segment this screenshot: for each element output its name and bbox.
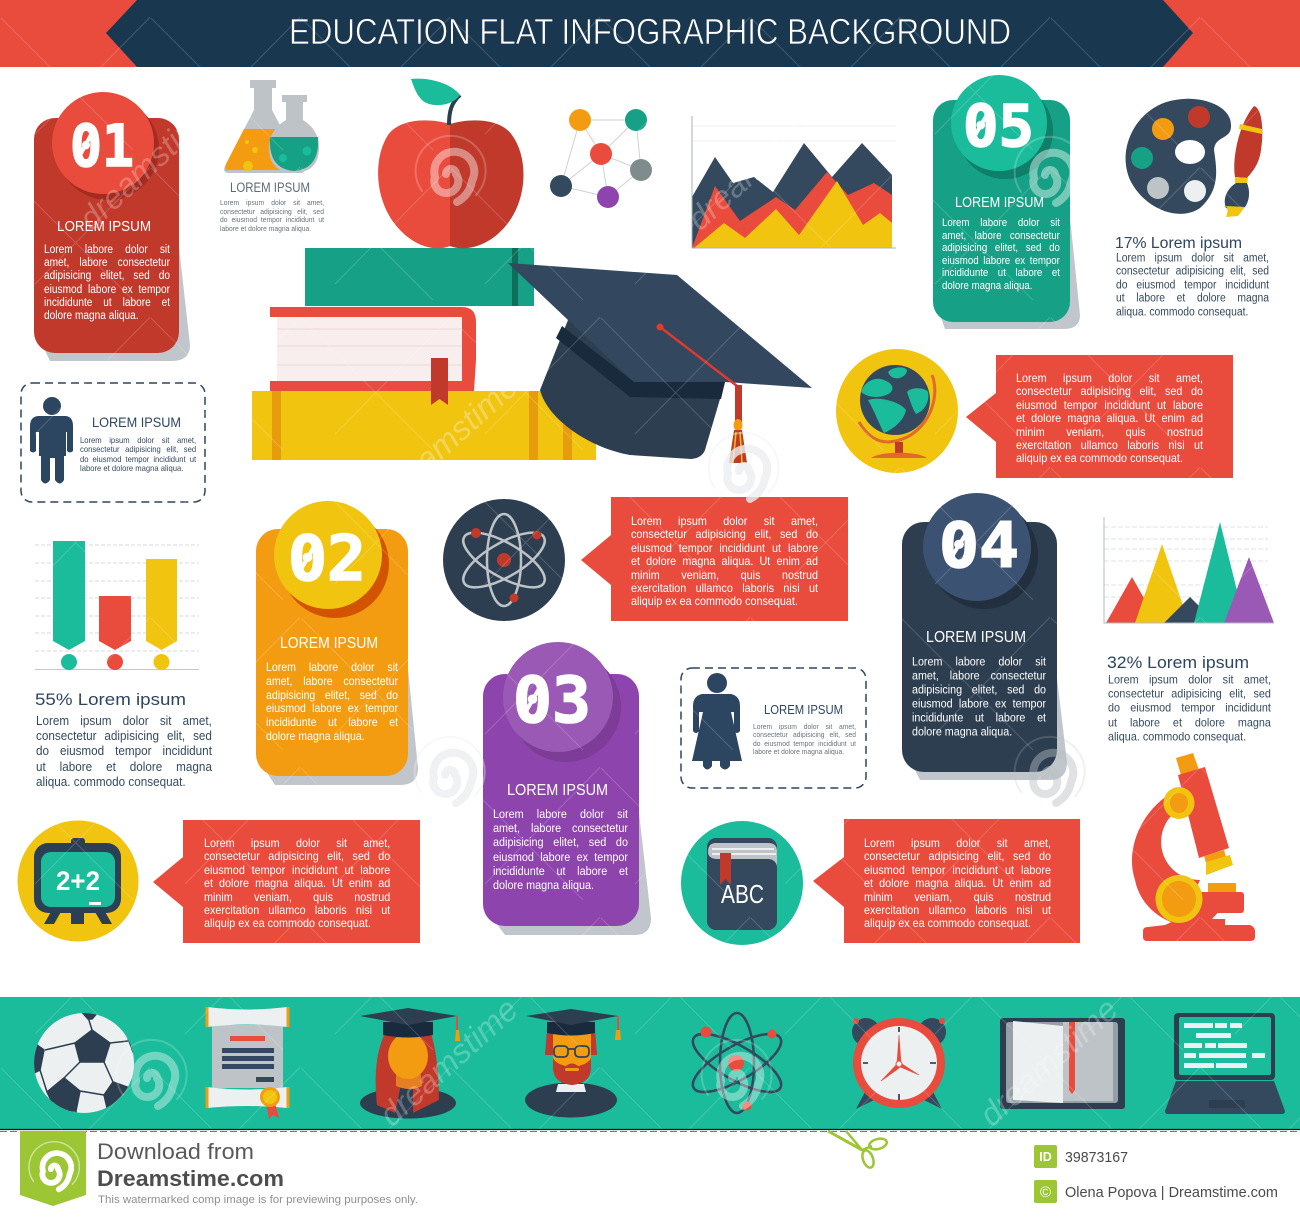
panel: card 03: Lorem labore dolor sit [493,807,628,821]
icon: ABC book [681,821,803,945]
panel: card 05: Lorem labore dolor sit [942,217,1060,229]
icon: woman [692,673,742,770]
callout: red box bottom left: consectetur adipisicing elit, sed do [204,849,390,863]
panel: card 04: dolore magna aliqua. [912,724,1012,738]
triangle chart [1104,517,1274,623]
text block: 32%: ut labore et dolore magna [1108,715,1271,729]
footer: copyright [1034,1180,1278,1203]
title: EDUCATION FLAT INFOGRAPHIC BACKGROUND [289,11,1011,52]
callout: red box bottom left [153,820,420,943]
text block: 17%: aliqua. commodo consequat. [1116,306,1248,318]
panel: card 02: 02 [288,522,366,595]
panel: card 04: adipisicing elitet, sed do [912,682,1046,696]
callout: red box top right: aliquip ex ea commodo consequat. [1016,451,1183,465]
icon: chalkboard [18,820,138,942]
callout: red box center: aliquip ex ea commodo consequat. [631,594,798,608]
panel: card 01: dolore magna aliqua. [44,310,139,322]
icon: globe [836,349,958,473]
panel: card 03: dolore magna aliqua. [493,878,594,892]
footer: download text: Dreamstime.com [97,1166,284,1191]
text block: 32%: consectetur adipisicing elit, sed [1108,687,1271,701]
callout: red box center: et dolore magna aliqua. Ut enim ad [631,554,818,568]
panel: man dashed box: do eiusmod tempor incididunt ut [80,454,196,464]
watermark overlay: dreamstime [72,92,223,237]
panel: card 02: LOREM IPSUM [280,635,378,652]
text block: 55%: aliqua. commodo consequat. [36,774,186,789]
icon: soccer ball [34,1013,134,1113]
icon: atom on dark circle [443,499,565,621]
panel: card 01 [34,92,190,361]
text block: 17%: 17% Lorem ipsum [1115,235,1242,252]
icon: apple [378,79,523,248]
panel: card 05: eiusmod labore ex tempor [942,254,1060,266]
panel: card 01: eiusmod labore ex tempor [44,284,170,296]
text block: 17%: do eiusmod tempor incididunt [1116,279,1269,291]
callout: red box bottom left: aliquip ex ea commodo consequat. [204,916,371,930]
callout: red box center [581,497,848,621]
footer: download text [97,1139,418,1206]
icon: laptop [1165,1013,1285,1114]
panel: card 01: 01 [70,112,134,180]
panel: card 04: amet, labore consectetur [912,668,1046,682]
callout: red box bottom center: exercitation ullamco laboris nisi ut [864,903,1051,917]
icon: alarm clock [852,1018,946,1109]
panel: woman dashed box: do eiusmod tempor incididunt ut [753,739,856,748]
panel: card 03: LOREM IPSUM [507,782,608,799]
panel: card 04: eiusmod labore ex tempor [912,696,1046,710]
icon: paint palette and brush [1126,99,1262,217]
footer: copyright: © [1040,1184,1051,1201]
callout: red box center: exercitation ullamco laboris nisi ut [631,581,818,595]
callout: red box bottom center: consectetur adipisicing elit, sed do [864,849,1051,863]
panel: card 03: 03 [513,664,591,737]
footer: cut line [0,1130,1300,1132]
panel: man dashed box: consectetur adipisicing elit, sed [80,444,196,454]
bar chart [35,541,199,670]
panel: man dashed box: labore et dolore magna aliqua. [80,463,183,473]
text block: 32% [1107,654,1271,746]
text block: 32%: aliqua. commodo consequat. [1108,729,1246,743]
panel: card 05: dolore magna aliqua. [942,280,1032,292]
panel: card 05 [933,75,1080,329]
text block: 32%: do eiusmod tempor incididunt [1108,701,1271,715]
text block: 17%: Lorem ipsum dolor sit amet, [1116,252,1269,264]
footer: download text: This watermarked comp image is for previewing purposes only. [98,1194,418,1206]
panel: woman dashed box: consectetur adipisicing elit, sed [753,730,856,739]
panel: card 03: incididunte ut labore et [493,864,628,878]
callout: red box bottom center: minim veniam, quis nostrud [864,890,1051,904]
callout: red box bottom left: et dolore magna aliqua. Ut enim ad [204,876,390,890]
watermark overlay: dreamstime [372,990,525,1133]
panel: card 02: amet, labore consectetur [266,674,398,688]
watermark overlay: dreamstime [372,367,525,510]
icon: microscope [1132,753,1255,941]
footer: image id: 39873167 [1065,1149,1128,1166]
callout: red box bottom left: exercitation ullamco laboris nisi ut [204,903,390,917]
text block: 32%: Lorem ipsum dolor sit amet, [1108,672,1271,686]
text block: 17%: ut labore et dolore magna [1116,293,1269,305]
icon: male graduate [525,1009,621,1118]
panel: card 01: LOREM IPSUM [57,218,151,235]
icon: flasks with caption: labore et dolore magna aliqua. [220,224,311,233]
footer: image id [1034,1145,1128,1168]
icon: atom [685,1013,789,1113]
panel: card 01: incididunte ut labore et [44,297,170,309]
panel: card 04: Lorem labore dolor sit [912,654,1046,668]
panel: man dashed box [21,383,205,502]
callout: red box center: minim veniam, quis nostrud [631,568,818,582]
icon: molecule network [550,109,652,208]
callout: red box top right [966,355,1233,478]
panel: card 02: eiusmod labore ex tempor [266,701,398,715]
panel: card 01: adipisicing elitet, sed do [44,270,170,282]
callout: red box top right: exercitation ullamco laboris nisi ut [1016,438,1203,452]
area chart [692,116,896,248]
panel: card 01: Lorem labore dolor sit [44,244,170,256]
callout: red box center: consectetur adipisicing elit, sed do [631,527,818,541]
panel: card 04 [902,493,1067,780]
icon: flasks with caption: consectetur adipisicing elit, sed [220,207,324,216]
panel: woman dashed box [681,668,866,788]
callout: red box top right: et dolore magna aliqua. Ut enim ad [1016,411,1203,425]
panel: card 03: adipisicing elitet, sed do [493,835,628,849]
text block: 55%: ut labore et dolore magna [36,759,212,774]
panel: card 05: adipisicing elitet, sed do [942,242,1060,254]
icon: ABC book: ABC [721,879,764,909]
panel: card 04: LOREM IPSUM [926,629,1026,646]
icon: graduation cap [508,263,812,463]
text block: 17%: consectetur adipisicing elit, sed [1116,266,1269,278]
panel: card 05: amet, labore consectetur [942,230,1060,242]
footer: download text: Download from [97,1139,254,1164]
callout: red box top right: consectetur adipisicing elit, sed do [1016,384,1203,398]
text block: 55% [35,690,212,791]
panel: card 04: incididunte ut labore et [912,710,1046,724]
callout: red box top right: minim veniam, quis nostrud [1016,425,1203,439]
text block: 55%: do eiusmod tempor incididunt [36,743,212,758]
callout: red box bottom center: eiusmod tempor incididunt ut labore [864,863,1051,877]
panel: card 01: amet, labore consectetur [44,257,170,269]
icon: chalkboard: 2+2 [56,866,100,896]
panel: card 05: 05 [963,92,1034,160]
callout: red box top right: eiusmod tempor incididunt ut labore [1016,398,1203,412]
footer: copyright: Olena Popova | Dreamstime.com [1065,1185,1278,1201]
panel: card 02: dolore magna aliqua. [266,729,365,743]
panel: card 02: incididunte ut labore et [266,715,398,729]
panel: card 05: LOREM IPSUM [955,195,1044,211]
panel: card 05: incididunte ut labore et [942,267,1060,279]
panel: card 03: amet, labore consectetur [493,821,628,835]
text block: 55%: consectetur adipisicing elit, sed [36,728,212,743]
panel: bottom icon band [0,997,1300,1130]
icon: flasks with caption: LOREM IPSUM [230,180,310,195]
callout: red box center: eiusmod tempor incididunt ut labore [631,541,818,555]
callout: red box bottom center: et dolore magna aliqua. Ut enim ad [864,876,1051,890]
panel: card 02: adipisicing elitet, sed do [266,688,398,702]
icon: scissors [828,1131,888,1169]
footer: image id: ID [1039,1150,1052,1164]
icon: open book [1000,1018,1125,1109]
icon: flasks with caption [220,80,324,235]
panel: card 04: 04 [939,509,1019,582]
callout: red box bottom left: eiusmod tempor incididunt ut labore [204,863,390,877]
panel: man dashed box: LOREM IPSUM [92,414,181,430]
text block: 55%: 55% Lorem ipsum [35,690,186,709]
text block: 17% [1115,235,1269,320]
callout: red box bottom left: minim veniam, quis nostrud [204,890,390,904]
watermark overlay: dreamstime [680,94,833,237]
icon: flasks with caption: do eiusmod tempor incididunt ut [220,215,324,224]
panel: woman dashed box: labore et dolore magna aliqua. [753,747,844,756]
callout: red box bottom center [813,819,1080,943]
panel: card 02 [256,501,418,785]
text block: 55%: Lorem ipsum dolor sit amet, [36,713,212,728]
icon: man [30,397,73,484]
text block: 32%: 32% Lorem ipsum [1107,654,1249,672]
panel: card 03: eiusmod labore ex tempor [493,850,628,864]
panel: card 03 [483,642,651,935]
header banner [0,0,1300,67]
icon: diploma scroll [207,1007,288,1119]
icon: books stack [252,248,596,460]
panel: woman dashed box: LOREM IPSUM [764,702,843,717]
callout: red box bottom center: aliquip ex ea commodo consequat. [864,916,1031,930]
footer: green ribbon logo [20,1131,86,1206]
watermark overlay: dreamstime [972,990,1125,1133]
icon: female graduate [360,1008,460,1118]
